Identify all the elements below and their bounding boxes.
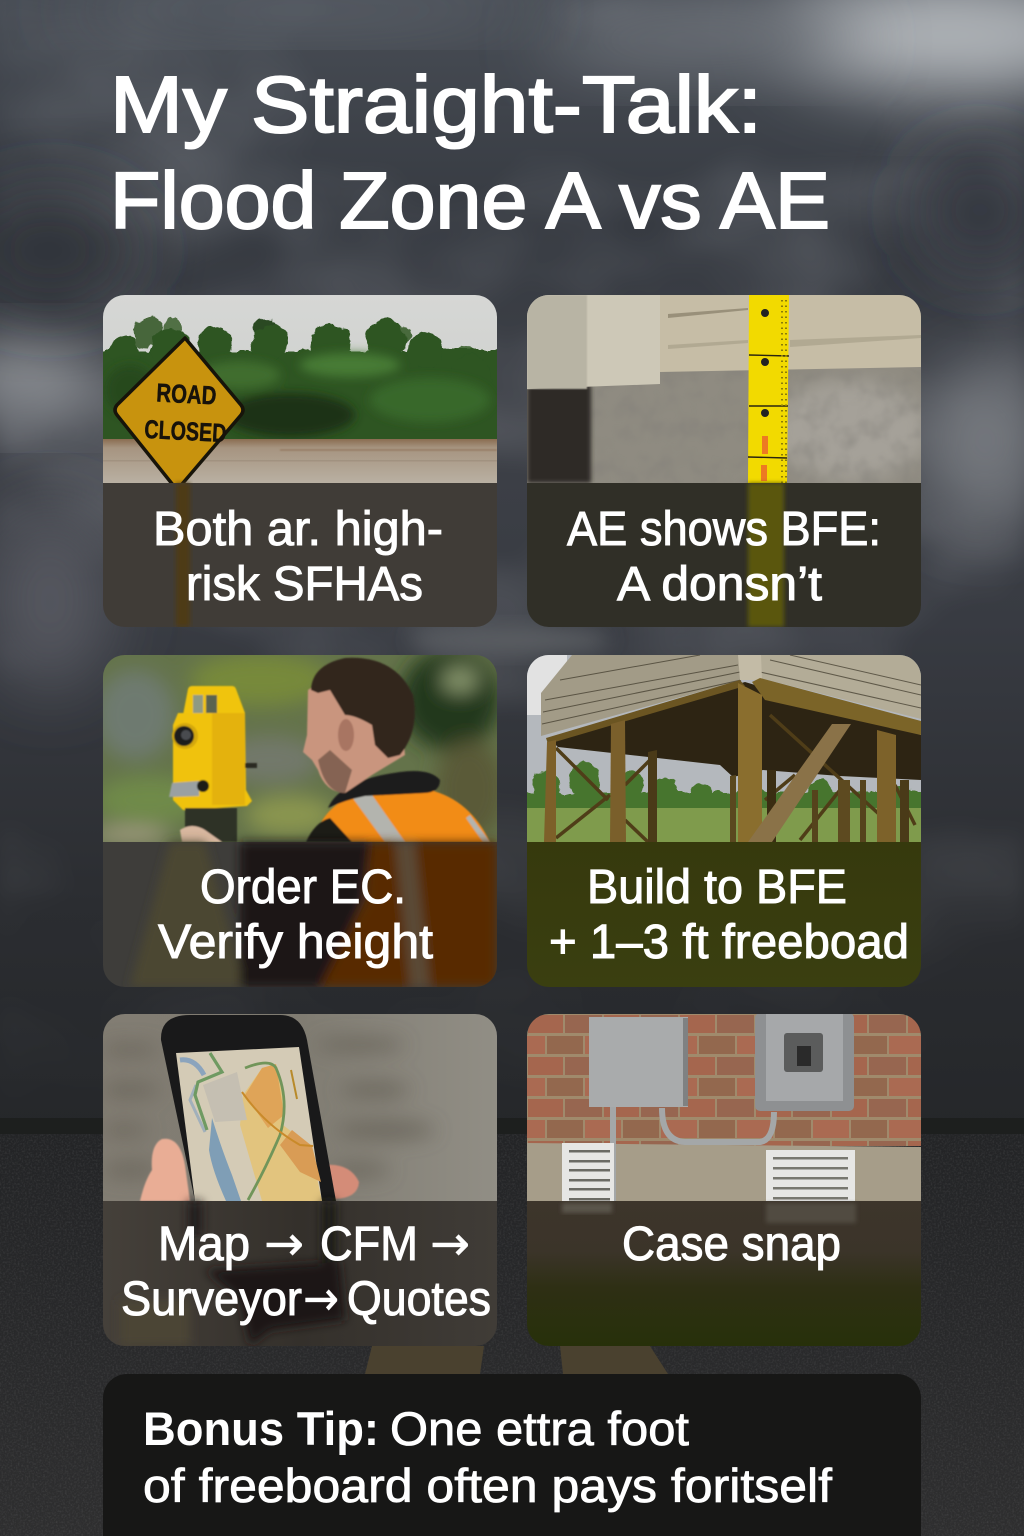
- caption text line 2: [121, 1271, 491, 1327]
- caption text line 1: [161, 1226, 468, 1270]
- photo: elevated house on wood posts: [510, 655, 940, 842]
- panel: build to BFE: [510, 655, 940, 987]
- caption band: [103, 483, 497, 627]
- title: [110, 60, 830, 245]
- panel: case snap: [527, 1013, 921, 1346]
- icon: grey junction box: [589, 1017, 688, 1107]
- panel: map to quotes: [100, 1014, 497, 1346]
- caption text line 2: →: [303, 1271, 339, 1327]
- photo: surveyor with yellow instrument: [90, 650, 505, 843]
- icon: road closed sign: ROAD: [156, 377, 217, 411]
- caption band: risk SFHAs: [186, 558, 423, 611]
- caption band: [527, 842, 921, 987]
- caption text line 1: CFM: [320, 1218, 418, 1271]
- house underside: [548, 682, 921, 780]
- caption band: AE shows BFE:: [567, 503, 881, 556]
- bonus tip text: One ettra foot: [390, 1402, 689, 1455]
- caption band: [527, 483, 921, 627]
- bonus tip text: Bonus Tip:: [143, 1402, 379, 1455]
- icon: road closed sign: [115, 338, 243, 490]
- caption text line 1: Map: [158, 1218, 250, 1271]
- panel: bonus tip: [103, 1374, 921, 1536]
- icon: smartphone: [161, 1015, 336, 1201]
- caption band: Both ar. high-: [153, 503, 443, 556]
- caption band: Case snap: [622, 1218, 841, 1271]
- caption band: Verify height: [158, 916, 433, 969]
- icon: total station: [169, 686, 257, 842]
- panel: both are high-risk: [90, 295, 510, 627]
- icon: hand finger: [325, 1165, 359, 1199]
- icon: flood vents: [562, 1143, 855, 1201]
- bonus tip text: [143, 1402, 833, 1512]
- icon: hand thumb: [140, 1139, 190, 1201]
- photo: phone showing flood map: [100, 1014, 497, 1201]
- caption band: Order EC.: [200, 861, 406, 914]
- wood posts and braces: [544, 683, 915, 842]
- title: My Straight-Talk:: [110, 60, 762, 149]
- icon: surveyor: [303, 658, 490, 842]
- caption text line 2: Quotes: [347, 1273, 491, 1326]
- conduit: [613, 1107, 774, 1201]
- caption band: Build to BFE: [587, 861, 847, 914]
- photo: brick wall with raised utilities and vents: [527, 1013, 921, 1201]
- panel: AE shows BFE: [527, 295, 930, 627]
- panel: order EC: [90, 650, 505, 987]
- caption band: [103, 1201, 497, 1346]
- caption band: [527, 1201, 921, 1346]
- caption band: A donsn’t: [617, 558, 822, 611]
- photo: flooded road with sign: [90, 295, 510, 490]
- caption text line 2: Surveyor: [121, 1273, 302, 1326]
- caption text line 1: →: [264, 1216, 304, 1272]
- photo: tape measure on foundation: [527, 295, 930, 483]
- icon: road closed sign: CLOSED: [144, 414, 227, 448]
- bonus tip text: of freeboard often pays foritself: [143, 1459, 833, 1512]
- title: Flood Zone A vs AE: [110, 156, 830, 245]
- caption band: + 1–3 ft freeboad: [549, 916, 909, 969]
- icon: electric meter panel: [755, 1013, 854, 1111]
- caption text line 1: →: [430, 1216, 470, 1272]
- caption band: [103, 842, 497, 987]
